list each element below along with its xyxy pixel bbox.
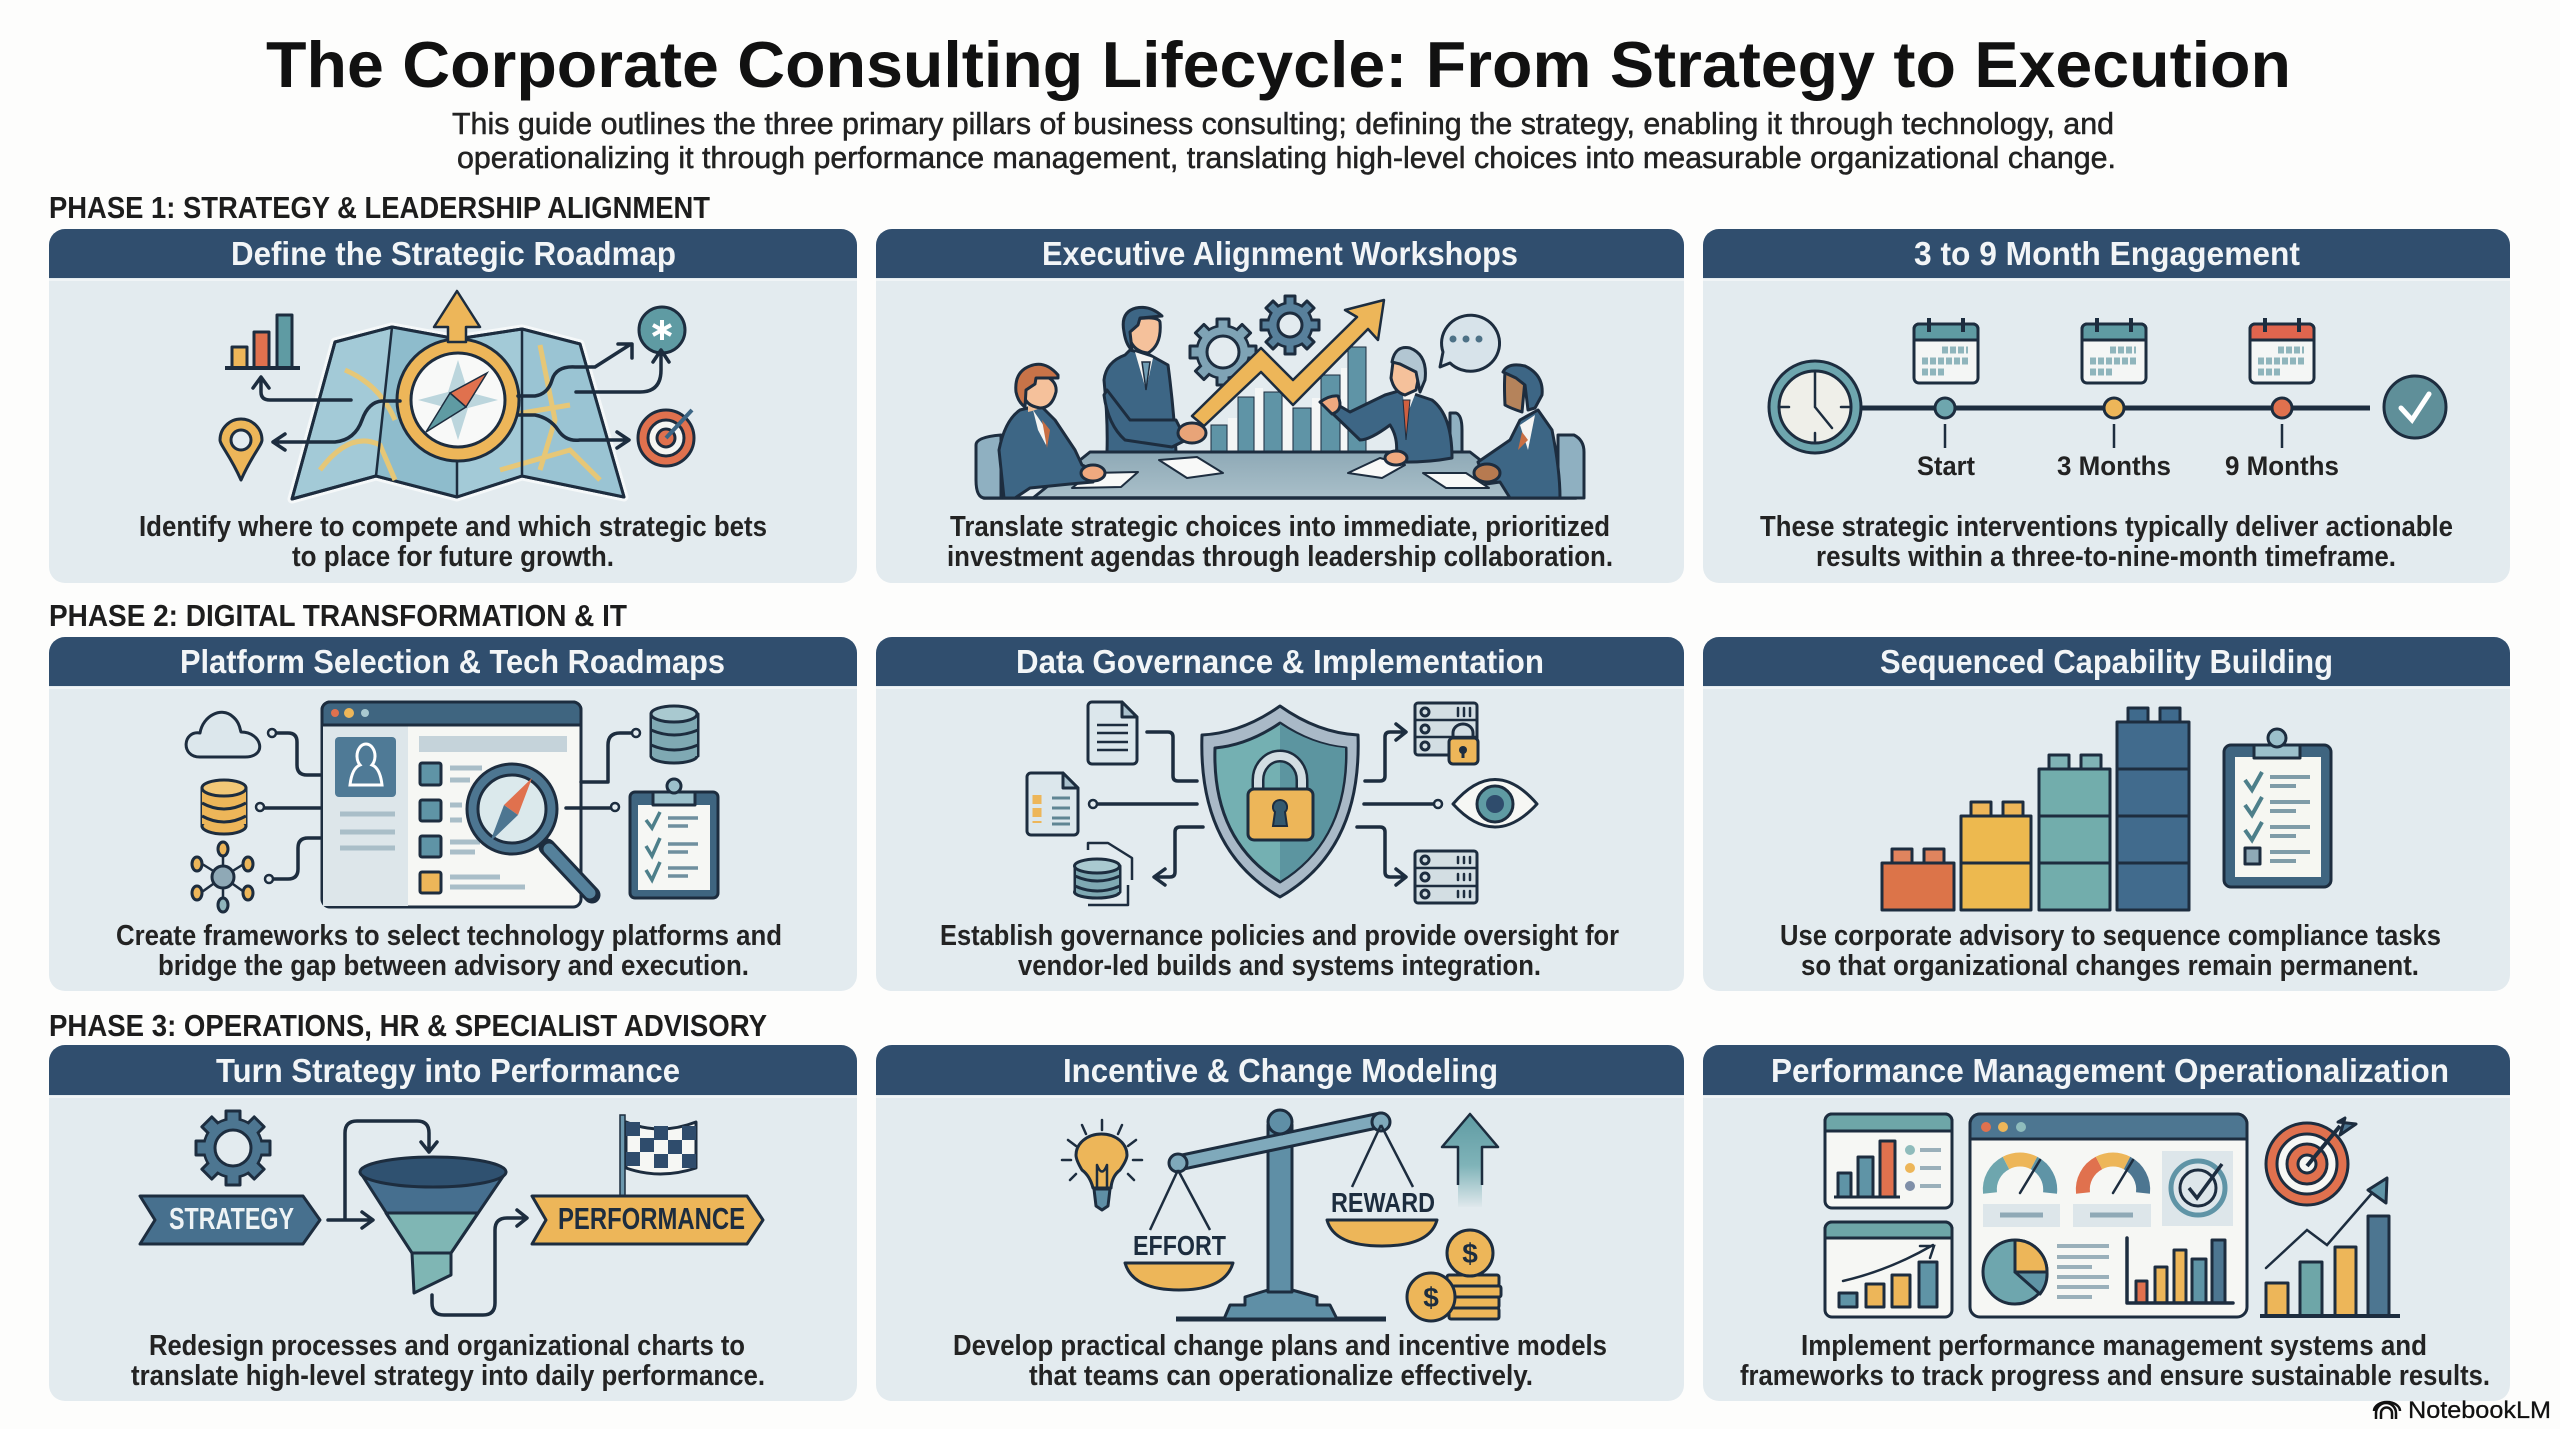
icon: rising bars xyxy=(1211,347,1366,452)
subtitle: This guide outlines the three primary pillars of business consulting; defining the strategy, enabling it through technology, and xyxy=(452,106,2114,141)
icon: target with dart xyxy=(2266,1118,2356,1205)
table xyxy=(1033,452,1529,498)
watermark: NotebookLM: NotebookLM xyxy=(2408,1397,2551,1424)
card text xyxy=(1780,920,2441,982)
pie chart xyxy=(1983,1240,2047,1304)
icon: map with compass xyxy=(220,291,694,499)
icon: gear xyxy=(196,1111,270,1185)
icon: shield xyxy=(1202,706,1358,897)
icon: coins xyxy=(1407,1230,1501,1321)
card text: Create frameworks to select technology platforms and xyxy=(116,920,782,952)
banner: performance: PERFORMANCE xyxy=(558,1201,745,1236)
icon: growth arrow xyxy=(1192,300,1384,426)
panel: executive alignment workshops xyxy=(876,229,1684,583)
card heading: Executive Alignment Workshops xyxy=(1042,235,1518,272)
panel: define the strategic roadmap xyxy=(49,229,857,583)
mini bar chart xyxy=(2136,1240,2225,1303)
illustration: browser with compass lens xyxy=(186,702,718,912)
panel: 3 to 9 month engagement xyxy=(1703,229,2510,583)
subtitle xyxy=(452,106,2116,175)
title: The Corporate Consulting Lifecycle: From Strategy to Execution xyxy=(266,28,2291,101)
timeline xyxy=(1769,318,2446,481)
icon: gears xyxy=(1190,296,1319,385)
person: far right seated xyxy=(1474,365,1584,498)
connectors xyxy=(1098,724,1434,885)
card text: investment agendas through leadership collaboration. xyxy=(947,541,1613,573)
icon: target xyxy=(638,410,694,466)
illustration: balance scale: $ xyxy=(1462,1238,1478,1269)
icon: checkered flag xyxy=(620,1115,696,1196)
icon: network xyxy=(192,842,253,912)
card text: that teams can operationalize effectively. xyxy=(1029,1360,1533,1392)
milestone labels: Start xyxy=(1917,451,1975,481)
icon: location pin xyxy=(220,419,262,480)
card heading: Turn Strategy into Performance xyxy=(216,1052,680,1089)
scale post and beam xyxy=(1150,1110,1413,1319)
card heading: Sequenced Capability Building xyxy=(1880,643,2333,680)
card text xyxy=(116,920,782,982)
heading: phase 3: PHASE 3: OPERATIONS, HR & SPECIALIST ADVISORY xyxy=(49,1008,767,1043)
milestone labels: 3 Months xyxy=(2057,451,2171,481)
illustration: shield and data flows xyxy=(1027,702,1537,905)
panel: data governance xyxy=(876,637,1684,991)
heading: phase 1: PHASE 1: STRATEGY & LEADERSHIP ALIGNMENT xyxy=(49,190,710,225)
icon: bar chart xyxy=(225,315,300,368)
papers xyxy=(1072,457,1489,488)
card text xyxy=(1740,1330,2490,1392)
card text xyxy=(131,1330,765,1392)
icon: clock xyxy=(1769,361,1861,453)
person: left seated xyxy=(976,364,1105,498)
icon: magnifier compass xyxy=(467,764,592,895)
card heading: Define the Strategic Roadmap xyxy=(231,235,676,272)
icon: eye xyxy=(1453,780,1537,827)
card text: Implement performance management systems and xyxy=(1801,1330,2427,1362)
milestone labels: 9 Months xyxy=(2225,451,2339,481)
label: reward pan: REWARD xyxy=(1331,1187,1435,1218)
milestone labels xyxy=(1917,451,2339,481)
icon: asterisk badge xyxy=(639,307,685,353)
panel: platform selection xyxy=(49,637,857,991)
illustration: balance scale xyxy=(1062,1110,1501,1321)
chart: stacked blocks xyxy=(1882,708,2189,910)
card text xyxy=(1760,511,2453,573)
icon: calendar 9 months xyxy=(2250,318,2314,383)
icon: check badge xyxy=(2384,376,2446,438)
widget: small bar chart xyxy=(1825,1114,1952,1208)
arrows: process flow xyxy=(328,1121,527,1315)
icon: light bulb xyxy=(1062,1120,1142,1210)
banner: strategy: STRATEGY xyxy=(169,1201,294,1236)
person: standing xyxy=(1104,307,1206,452)
chart: rising bars with arrow xyxy=(2260,1178,2400,1316)
card heading: Incentive & Change Modeling xyxy=(1063,1052,1498,1089)
widget: main dashboard xyxy=(1970,1114,2247,1317)
icon: server xyxy=(1415,851,1477,903)
icon: speech bubble xyxy=(1440,315,1500,371)
banner: performance xyxy=(532,1196,763,1244)
card text: Develop practical change plans and incentive models xyxy=(953,1330,1607,1362)
arrows: connector paths xyxy=(253,344,669,450)
person: right seated xyxy=(1320,348,1462,465)
heading: phase 2: PHASE 2: DIGITAL TRANSFORMATION & IT xyxy=(49,598,627,633)
card text: Use corporate advisory to sequence compliance tasks xyxy=(1780,920,2441,952)
card text: translate high-level strategy into daily performance. xyxy=(131,1360,765,1392)
card text xyxy=(139,511,767,573)
icon: calendar 3 months xyxy=(2082,318,2146,383)
icon: clipboard xyxy=(630,779,718,898)
label: effort pan xyxy=(1125,1230,1233,1290)
card heading: Performance Management Operationalization xyxy=(1771,1052,2449,1089)
icon: gold database xyxy=(202,780,246,834)
illustration: strategy funnel performance xyxy=(140,1111,763,1315)
card text: Establish governance policies and provide oversight for xyxy=(940,920,1619,952)
icon: funnel xyxy=(360,1157,506,1293)
illustration: leadership meeting xyxy=(976,296,1584,498)
icon: data sheet xyxy=(1027,773,1078,835)
card text: vendor-led builds and systems integration. xyxy=(1018,950,1541,982)
icon: server with lock xyxy=(1415,703,1478,764)
card text xyxy=(953,1330,1607,1392)
card text: results within a three-to-nine-month timeframe. xyxy=(1816,541,2396,573)
illustration: dashboards xyxy=(1825,1114,2400,1317)
subtitle: operationalizing it through performance management, translating high-level choices into measurable organizational change. xyxy=(457,140,2116,175)
illustration: balance scale: $ xyxy=(1423,1282,1439,1313)
panel: performance management operationalization xyxy=(1703,1045,2510,1401)
card text: so that organizational changes remain permanent. xyxy=(1801,950,2419,982)
browser window xyxy=(322,702,581,907)
icon: up arrow xyxy=(434,291,480,342)
icon: small database xyxy=(1074,843,1132,905)
card heading: Platform Selection & Tech Roadmaps xyxy=(180,643,725,680)
card text: Identify where to compete and which strategic bets xyxy=(139,511,767,543)
icon: compass xyxy=(397,339,519,461)
card text: to place for future growth. xyxy=(292,541,614,573)
card heading: Data Governance & Implementation xyxy=(1016,643,1544,680)
panel: incentive and change modeling xyxy=(876,1045,1684,1401)
card text: Translate strategic choices into immediate, prioritized xyxy=(950,511,1610,543)
label: reward pan xyxy=(1327,1187,1437,1246)
gauges xyxy=(1990,1160,2143,1193)
card text xyxy=(940,920,1619,982)
banner: strategy xyxy=(140,1196,320,1244)
icon: document xyxy=(1088,702,1137,764)
icon: cloud xyxy=(186,712,260,757)
card text: Redesign processes and organizational charts to xyxy=(149,1330,745,1362)
widget: trend chart xyxy=(1825,1222,1952,1317)
panel: turn strategy into performance xyxy=(49,1045,857,1401)
card text: These strategic interventions typically deliver actionable xyxy=(1760,511,2453,543)
milestones xyxy=(1935,398,2292,418)
card text: bridge the gap between advisory and execution. xyxy=(158,950,749,982)
icon: calendar start xyxy=(1914,318,1978,383)
icon: clipboard xyxy=(2224,729,2331,887)
icon: up arrow xyxy=(1442,1114,1498,1207)
panel: sequenced capability building xyxy=(1703,637,2510,991)
label: effort pan: EFFORT xyxy=(1133,1230,1226,1261)
card text xyxy=(947,511,1613,573)
connectors xyxy=(264,733,634,879)
icon: teal database xyxy=(651,706,698,763)
card heading: 3 to 9 Month Engagement xyxy=(1914,235,2300,272)
